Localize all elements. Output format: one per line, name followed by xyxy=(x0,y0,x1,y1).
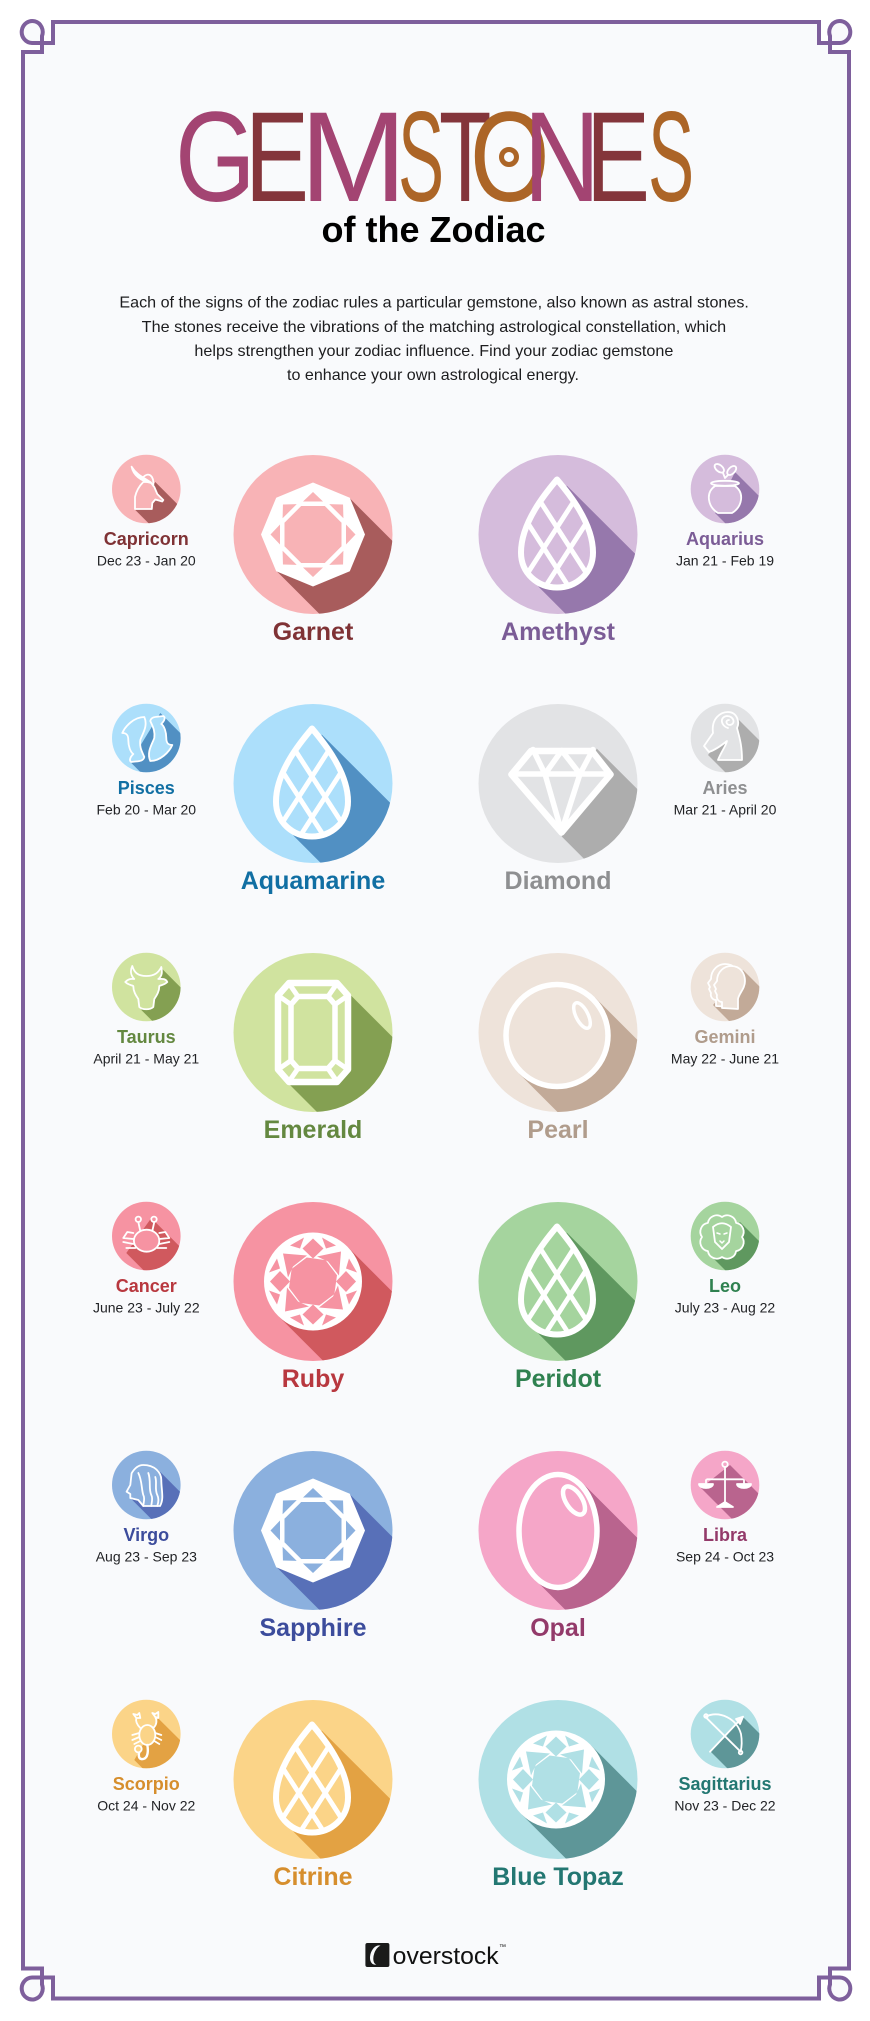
sign name: Aquarius xyxy=(686,529,764,549)
sign dates: April 21 - May 21 xyxy=(93,1051,199,1067)
sign dates: July 23 - Aug 22 xyxy=(675,1300,775,1316)
title: Gemstones: E xyxy=(586,86,650,228)
icon: Gemini heads xyxy=(690,952,760,1022)
sign name: Capricorn xyxy=(104,529,189,549)
sign dates: Jan 21 - Feb 19 xyxy=(676,553,774,569)
icon: Sagittarius bow xyxy=(691,1700,793,1801)
gem name: Citrine xyxy=(273,1863,353,1891)
panel: Citrine xyxy=(234,1700,472,1982)
icon: pearl gem xyxy=(478,953,638,1112)
sign name: Aries xyxy=(702,778,748,798)
icon: Libra scales xyxy=(690,1450,760,1520)
icon: garnet gem xyxy=(234,455,392,614)
panel: Sagittarius sign xyxy=(674,1700,793,1814)
icon: Virgo head xyxy=(112,1450,181,1520)
sign dates: Aug 23 - Sep 23 xyxy=(96,1549,197,1565)
title: Gemstones: S xyxy=(398,85,444,228)
panel: Amethyst xyxy=(478,455,638,645)
icon: Aquarius jar xyxy=(690,454,760,524)
icon: peridot gem xyxy=(478,1202,638,1361)
icon: Leo lion xyxy=(690,1202,760,1270)
icon: Pisces fish xyxy=(112,704,181,772)
title: Gemstones: E xyxy=(245,86,309,228)
sign name: Virgo xyxy=(123,1525,169,1545)
panel: Virgo sign xyxy=(96,1450,196,1564)
sign dates: Dec 23 - Jan 20 xyxy=(97,553,196,569)
panel: Aquamarine xyxy=(234,704,392,894)
sign dates: Feb 20 - Mar 20 xyxy=(96,802,196,818)
gem name: Diamond xyxy=(505,867,611,895)
sign name: Taurus xyxy=(117,1027,176,1047)
gem name: Aquamarine xyxy=(241,867,385,895)
panel: Pisces sign xyxy=(98,704,196,814)
gem name: Opal xyxy=(530,1614,586,1642)
intro paragraph xyxy=(119,294,749,384)
panel: Peridot xyxy=(478,1202,638,1387)
gem name: Peridot xyxy=(515,1365,602,1393)
title: Gemstones: T xyxy=(439,86,491,229)
gem name: Garnet xyxy=(273,618,354,646)
panel: Aquarius sign xyxy=(676,454,774,566)
sign dates: June 23 - July 22 xyxy=(93,1300,200,1316)
icon: Cancer crab xyxy=(112,1202,181,1270)
trademark: ™ xyxy=(499,1944,506,1951)
panel: Pearl xyxy=(478,953,638,1138)
sign name: Scorpio xyxy=(113,1774,180,1794)
icon: overstock mark xyxy=(365,1943,389,1967)
panel: Capricorn sign xyxy=(98,454,196,566)
icon: Taurus bull xyxy=(112,952,181,1022)
panel: Blue Topaz xyxy=(478,1700,740,1964)
sign dates: Mar 21 - April 20 xyxy=(674,802,777,818)
title: Gemstones: M xyxy=(300,86,407,229)
panel: Cancer sign xyxy=(93,1202,201,1316)
icon: citrine gem xyxy=(234,1700,472,1982)
icon: diamond gem xyxy=(478,704,638,863)
sign dates: Nov 23 - Dec 22 xyxy=(674,1798,776,1814)
panel: Taurus sign xyxy=(93,953,210,1067)
icon: opal gem xyxy=(478,1451,638,1610)
panel: Sapphire xyxy=(234,1451,392,1641)
icon: amethyst gem xyxy=(478,455,638,614)
panel: Garnet xyxy=(234,455,392,640)
gem name: Pearl xyxy=(527,1116,589,1144)
panel: Diamond xyxy=(478,704,638,889)
gem name: Amethyst xyxy=(501,618,616,646)
icon: sapphire gem xyxy=(234,1451,392,1610)
panel: Gemini sign xyxy=(672,952,778,1066)
title: Gemstones: G xyxy=(175,86,256,228)
gem name: Ruby xyxy=(282,1365,344,1393)
sign name: Cancer xyxy=(116,1276,177,1296)
sign dates: Sep 24 - Oct 23 xyxy=(676,1549,774,1565)
intro paragraph: to enhance your own astrological energy. xyxy=(287,367,579,384)
icon: emerald gem xyxy=(234,953,392,1112)
title: Gemstones: S xyxy=(648,85,694,228)
panel: Leo sign xyxy=(675,1202,774,1316)
icon: blue topaz gem xyxy=(478,1700,740,1964)
title: Gemstones xyxy=(175,85,694,229)
sign dates: Oct 24 - Nov 22 xyxy=(97,1798,196,1814)
sign dates: May 22 - June 21 xyxy=(671,1051,779,1067)
gem name: Emerald xyxy=(264,1116,362,1144)
panel: Libra sign xyxy=(676,1451,780,1565)
panel: Ruby xyxy=(234,1202,392,1392)
intro paragraph: helps strengthen your zodiac influence. Find your zodiac gemstone xyxy=(194,343,673,360)
intro paragraph: Each of the signs of the zodiac rules a particular gemstone, also known as astral stones. xyxy=(119,294,749,312)
panel: Aries sign xyxy=(674,704,776,818)
gem name: Sapphire xyxy=(260,1614,367,1642)
sign name: Libra xyxy=(703,1525,748,1545)
logo: overstock xyxy=(365,1943,506,1970)
sign name: Gemini xyxy=(694,1027,756,1047)
icon: Scorpio scorpion xyxy=(112,1700,208,1810)
sign name: Sagittarius xyxy=(678,1774,772,1794)
icon: ruby gem xyxy=(234,1202,392,1361)
subtitle: of the Zodiac xyxy=(322,209,546,250)
icon: Capricorn goat xyxy=(112,454,181,524)
panel: Opal xyxy=(478,1451,638,1641)
icon: aquamarine gem xyxy=(234,704,392,863)
panel: Emerald xyxy=(234,953,392,1138)
title: Gemstones: O xyxy=(470,85,550,229)
panel: Scorpio sign xyxy=(97,1700,208,1814)
icon: Aries ram xyxy=(690,704,760,772)
sign name: Leo xyxy=(709,1276,741,1296)
gem name: Blue Topaz xyxy=(492,1863,624,1891)
sign name: Pisces xyxy=(118,778,175,798)
intro paragraph: The stones receive the vibrations of the matching astrological constellation, which xyxy=(142,319,726,336)
wordmark: overstock xyxy=(393,1943,499,1970)
title: Gemstones: N xyxy=(524,86,600,228)
